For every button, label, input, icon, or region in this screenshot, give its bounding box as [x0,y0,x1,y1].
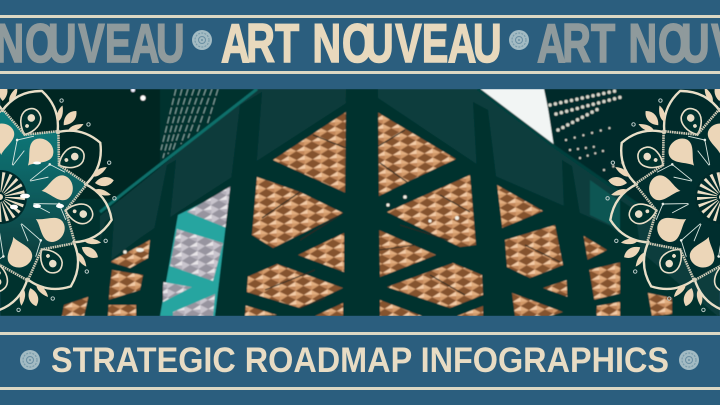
icon: bottom right medallion [679,350,699,370]
icon: bottom left medallion [20,350,40,370]
wall left [100,89,348,268]
city lights [550,91,630,170]
title: ART NOUVEAU [221,14,502,75]
copper panels [62,112,672,316]
icon: left mandala [0,89,117,312]
subtitle: STRATEGIC ROADMAP INFOGRAPHICS [51,341,669,380]
icon: right mandala [605,89,720,312]
wall right [378,89,720,318]
lit panels [163,186,231,316]
sky [478,89,554,147]
panel divider lines [262,130,560,308]
icon: left medallion [192,30,212,50]
panel: bottom title band [0,316,720,405]
columns [84,89,650,316]
panel: top header band [0,0,720,89]
icon: right medallion [509,30,529,50]
teal backdrop [159,202,226,316]
perforated tower left [161,89,218,158]
beam highlight [100,89,257,212]
panel: photo of building ceiling [0,88,720,318]
right tower [544,89,550,112]
